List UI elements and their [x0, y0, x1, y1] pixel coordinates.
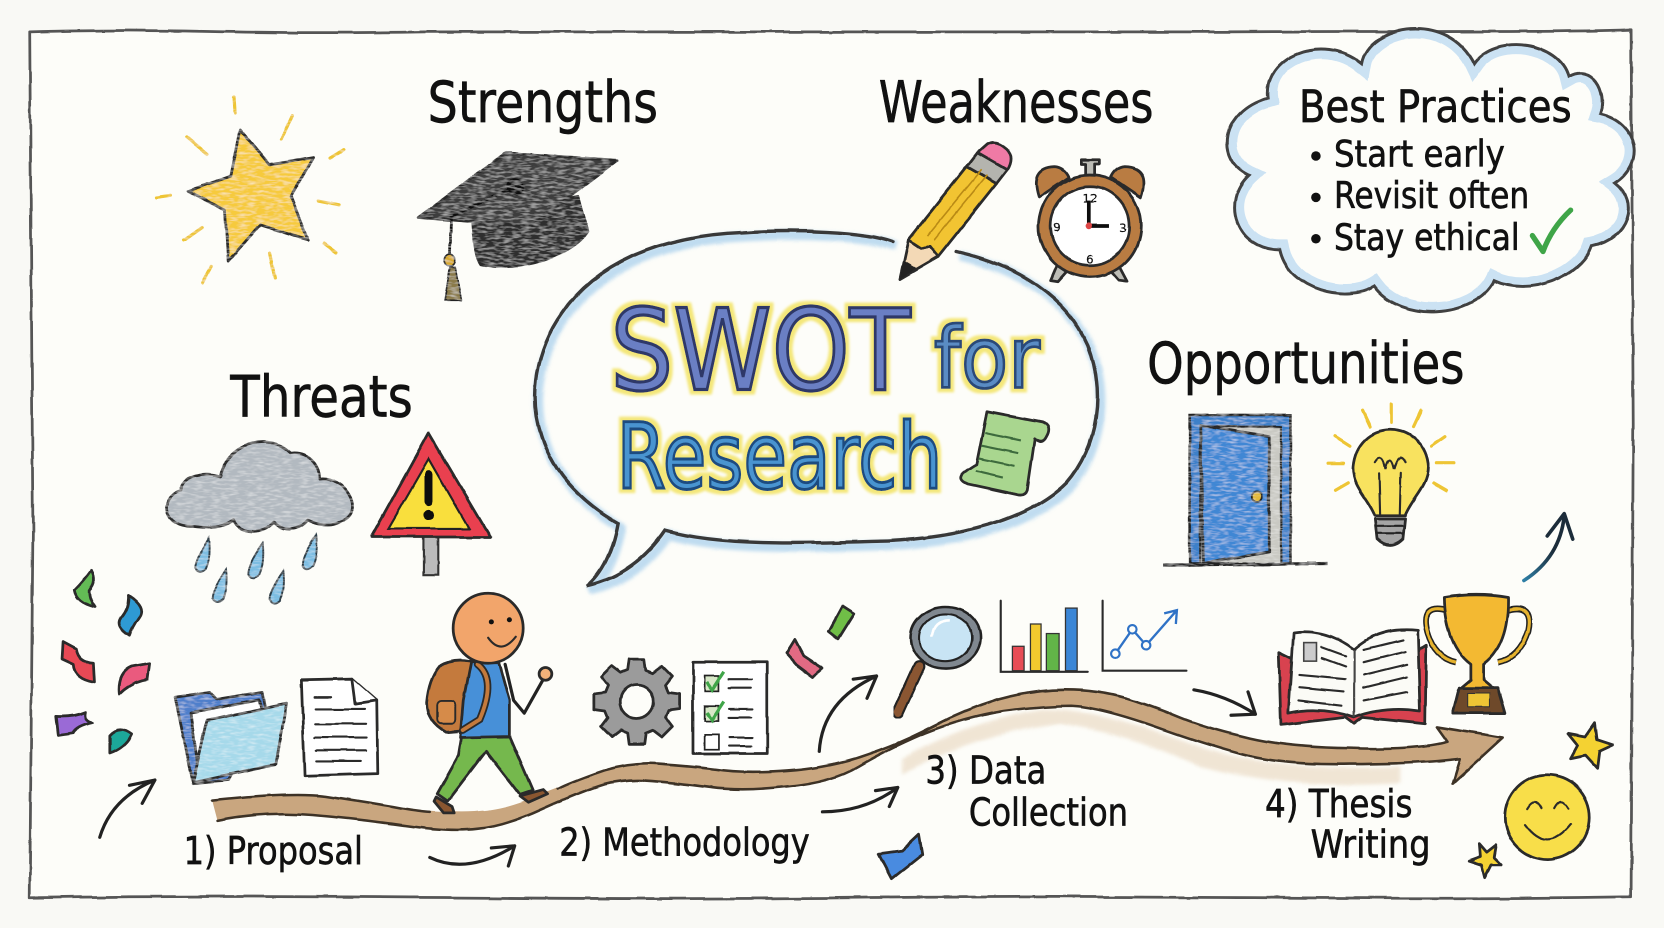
legs: [437, 736, 533, 801]
arrow: to proposal: [100, 780, 155, 837]
icon: document: [301, 679, 378, 776]
strap: [463, 664, 488, 730]
character: walking student: [427, 593, 552, 813]
heading: Threats: Threats: [229, 364, 413, 431]
confetti: middle pieces: [786, 606, 922, 879]
heading: Best Practices: Best Practices: [1299, 81, 1572, 133]
icon: checklist: [693, 662, 767, 753]
icon: shining star: [156, 98, 344, 282]
cloud shape: [1227, 28, 1634, 312]
icon: open door: [1163, 415, 1328, 566]
icon: alarm clock: 6: [1086, 252, 1094, 266]
title: for: for: [934, 309, 1040, 408]
arrow: proposal to methodology: [430, 846, 515, 866]
chart: line chart: [1103, 601, 1186, 671]
label: 3) Data Collection: [925, 750, 1128, 836]
central speech bubble: [535, 231, 1101, 590]
icon: green check: [1532, 210, 1571, 252]
icon: alarm clock: 3: [1119, 220, 1126, 234]
icon: open book: [1279, 630, 1426, 725]
label: 1) Proposal: 1) Proposal: [184, 830, 363, 874]
strap fill: [463, 664, 488, 730]
label: 3) Data Collection: 3) Data: [925, 750, 1046, 794]
label: 4) Thesis Writing: Writing: [1311, 823, 1431, 867]
section: Weaknesses: [879, 69, 1154, 281]
icon: alarm clock: [1036, 160, 1143, 281]
section: Strengths: [156, 69, 658, 300]
path: winding research road: [212, 690, 1503, 830]
label: 4) Thesis Writing: 4) Thesis: [1265, 783, 1412, 827]
icon: warning sign: [371, 433, 490, 575]
icon: pencil: [900, 142, 1011, 279]
icon: smiley face: [1505, 775, 1590, 860]
icon: green scroll: [961, 412, 1049, 495]
title: SWOT: SWOT: [610, 285, 912, 416]
chart: bar chart: [1001, 601, 1088, 672]
icon: alarm clock: 12: [1082, 192, 1097, 206]
arrow: methodology to data: [819, 676, 877, 751]
icon: alarm clock: 9: [1053, 220, 1061, 234]
icon: trophy: [1426, 595, 1529, 713]
icon: magnifying glass: [898, 607, 981, 713]
arrow: towards data collection: [822, 787, 898, 812]
list: practices: [1311, 134, 1529, 259]
section: Opportunities: [1147, 330, 1464, 566]
backpack: [427, 661, 480, 732]
shirt: [461, 662, 509, 738]
icon: small star: [1469, 844, 1502, 878]
icon: gear: [594, 659, 680, 744]
heading: Weaknesses: Weaknesses: [879, 69, 1154, 136]
bubble shape: [535, 231, 1101, 590]
list: practices: Start early: [1334, 134, 1505, 176]
icon: graduation cap: [418, 153, 618, 300]
icon: light bulb: [1328, 404, 1454, 545]
heading: Strengths: Strengths: [428, 69, 658, 136]
hand: [539, 668, 552, 680]
label: 3) Data Collection: Collection: [969, 792, 1128, 836]
heading: Opportunities: Opportunities: [1147, 330, 1464, 397]
list: practices: Stay ethical: [1334, 217, 1520, 259]
label: 2) Methodology: 2) Methodology: [559, 821, 810, 865]
shoes: [434, 790, 548, 813]
confetti: left cluster: [56, 570, 150, 753]
label: 4) Thesis Writing: [1265, 783, 1431, 867]
arrow: upward trend: [1524, 514, 1573, 580]
section: Threats: [167, 364, 490, 604]
callout: Best Practices cloud: [1227, 28, 1634, 312]
arrow: towards thesis: [1194, 690, 1255, 715]
head: [453, 593, 523, 663]
list: practices: Revisit often: [1334, 175, 1529, 217]
title: Research: Research: [617, 403, 942, 510]
icon: folder: [175, 692, 287, 783]
icon: rain cloud: [167, 442, 352, 604]
arm: [505, 664, 543, 713]
icon: large star: [1568, 723, 1613, 768]
